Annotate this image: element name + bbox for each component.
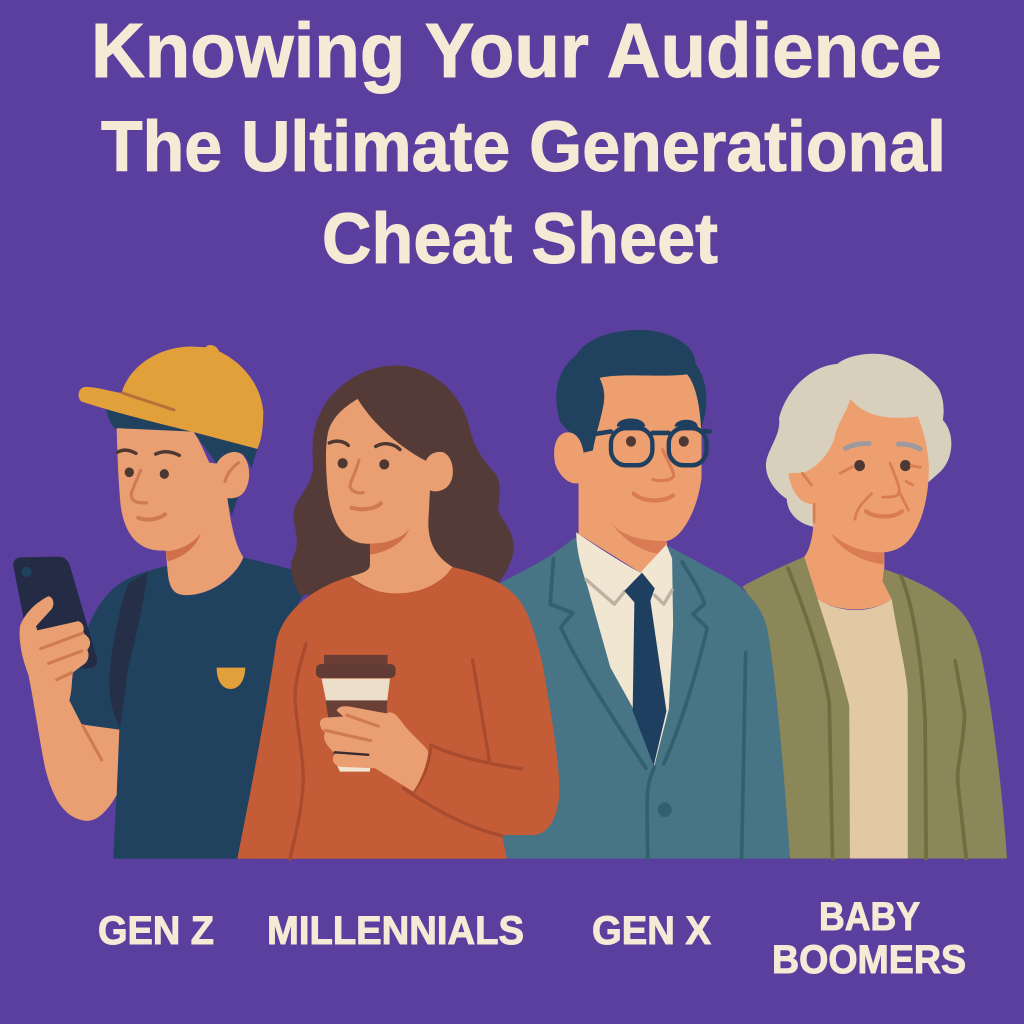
label: baby boomers: BOOMERS bbox=[772, 938, 966, 982]
figure: gen x bbox=[500, 330, 790, 858]
label: baby boomers: BABY bbox=[819, 895, 920, 939]
label: millennials: MILLENNIALS bbox=[267, 909, 524, 953]
icon: coffee cup bbox=[316, 655, 396, 772]
label: gen x: GEN X bbox=[592, 909, 711, 953]
label: gen z: GEN Z bbox=[98, 909, 214, 953]
illustration: four generations bbox=[13, 330, 1007, 859]
figure: baby boomer bbox=[742, 354, 1007, 858]
figure: gen z bbox=[13, 345, 307, 859]
title line 3: Cheat Sheet bbox=[322, 200, 718, 279]
title line 1: Knowing Your Audience bbox=[91, 8, 942, 94]
label: baby boomers bbox=[772, 895, 966, 982]
title line 2: The Ultimate Generational bbox=[101, 108, 946, 187]
generation labels bbox=[98, 895, 966, 982]
figure: millennial bbox=[237, 365, 559, 859]
title bbox=[91, 8, 946, 279]
